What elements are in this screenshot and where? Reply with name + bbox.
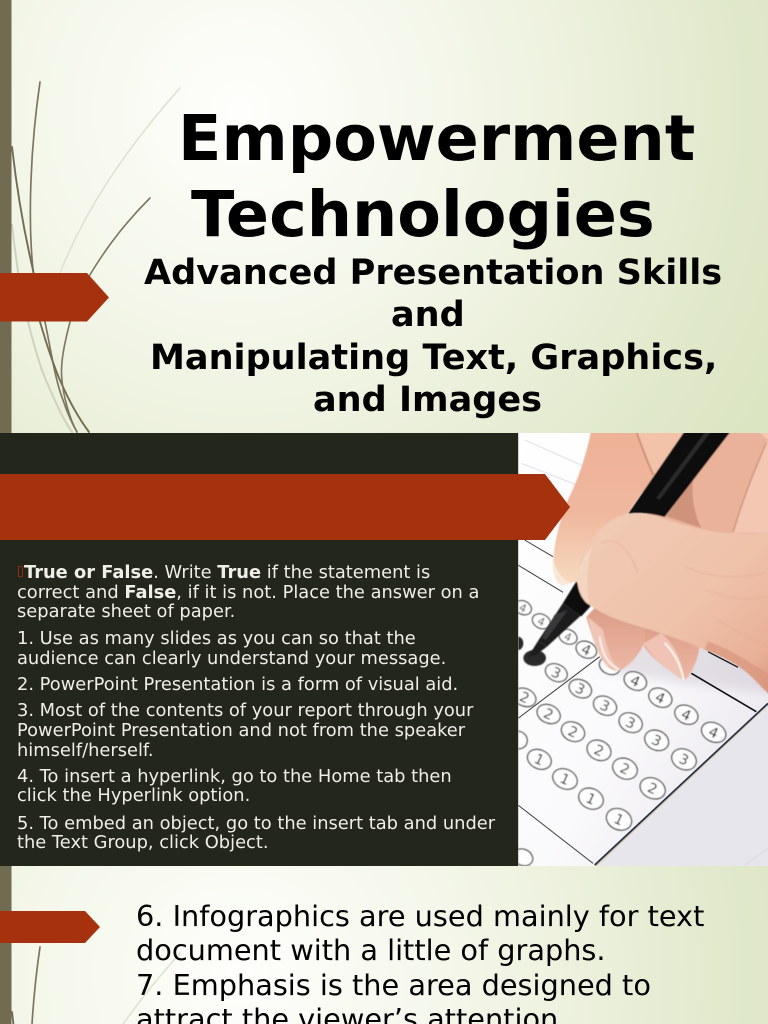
subtitle: Advanced Presentation Skills — [144, 252, 722, 293]
text block: quiz instructions: True or False. Write True if the statement is — [24, 562, 430, 583]
answer bubbles: 3 — [676, 751, 691, 769]
text block: quiz instructions: 4. To insert a hyperlink, go to the Home tab then — [17, 766, 452, 787]
text block: quiz instructions: audience can clearly understand your message. — [17, 648, 446, 669]
answer bubbles: 4 — [562, 630, 574, 645]
text block: quiz instructions: click the Hyperlink option. — [17, 785, 250, 806]
subtitle — [144, 252, 722, 420]
lower fingers — [586, 608, 646, 670]
answer bubbles — [506, 598, 729, 869]
arrow: slide 1 ribbon — [0, 273, 109, 322]
answer bubbles: 4 — [678, 706, 693, 725]
text block: quiz instructions: 5. To embed an object, go to the insert tab and under — [17, 813, 495, 834]
subtitle: and — [391, 294, 465, 335]
text block: quiz instructions: separate sheet of paper. — [17, 601, 235, 622]
text block: quiz instructions: 2. PowerPoint Presentation is a form of visual aid. — [17, 674, 458, 695]
text block: quiz instructions: 1. Use as many slides as you can so that the — [17, 628, 416, 649]
subtitle: and Images — [313, 379, 542, 420]
answer bubbles: 4 — [652, 689, 667, 708]
text block: quiz instructions: the Text Group, click Object. — [17, 832, 268, 853]
answer bubbles: 2 — [645, 780, 660, 798]
pen — [628, 426, 735, 517]
answer bubbles: 2 — [591, 742, 606, 760]
hand group — [528, 426, 768, 696]
text block: quiz instructions: himself/herself. — [17, 740, 154, 761]
text block: questions 6 and 7 — [136, 899, 704, 1024]
bullet glyph — [18, 566, 23, 577]
answer bubbles: 2 — [541, 706, 556, 724]
answer bubbles: 3 — [623, 714, 638, 733]
answer bubbles: 3 — [572, 680, 587, 699]
title: Empowerment — [178, 101, 695, 175]
answer bubbles: 4 — [627, 673, 642, 691]
answer bubbles: 1 — [557, 771, 572, 789]
panel: quiz dark background — [0, 433, 519, 866]
title: Technologies — [191, 177, 655, 251]
text block: questions 6 and 7: 6. Infographics are used mainly for text — [136, 899, 704, 933]
text block: quiz instructions — [17, 562, 496, 853]
text block: quiz instructions: 3. Most of the contents of your report through your — [17, 700, 473, 721]
answer bubbles: 1 — [531, 751, 546, 769]
arrow: slide 2 ribbon — [0, 474, 570, 540]
answer bubbles: 1 — [611, 811, 626, 829]
image: hand filling in answer sheet — [518, 433, 768, 866]
title — [178, 101, 695, 251]
text block: quiz instructions: PowerPoint Presentation and not from the speaker — [17, 720, 465, 741]
answer bubbles: 2 — [565, 723, 580, 742]
answer bubbles: 3 — [649, 732, 664, 750]
text block: questions 6 and 7: 7. Emphasis is the area designed to — [136, 968, 651, 1002]
arrow: slide 3 ribbon — [0, 911, 100, 943]
answer bubbles: 4 — [706, 724, 721, 742]
answer bubbles: 3 — [597, 697, 612, 716]
back of hand — [631, 426, 768, 540]
answer bubbles: 2 — [617, 760, 632, 779]
thumb — [577, 513, 768, 696]
answer bubbles: 3 — [548, 664, 563, 683]
text block: quiz instructions: correct and False, if it is not. Place the answer on a — [17, 582, 479, 603]
answer bubbles: 4 — [578, 641, 593, 660]
answer bubbles: 4 — [535, 614, 547, 629]
index finger — [553, 426, 653, 586]
text block: questions 6 and 7: document with a little of graphs. — [136, 933, 606, 967]
answer bubbles: 1 — [583, 790, 598, 809]
subtitle: Manipulating Text, Graphics, — [150, 337, 717, 378]
